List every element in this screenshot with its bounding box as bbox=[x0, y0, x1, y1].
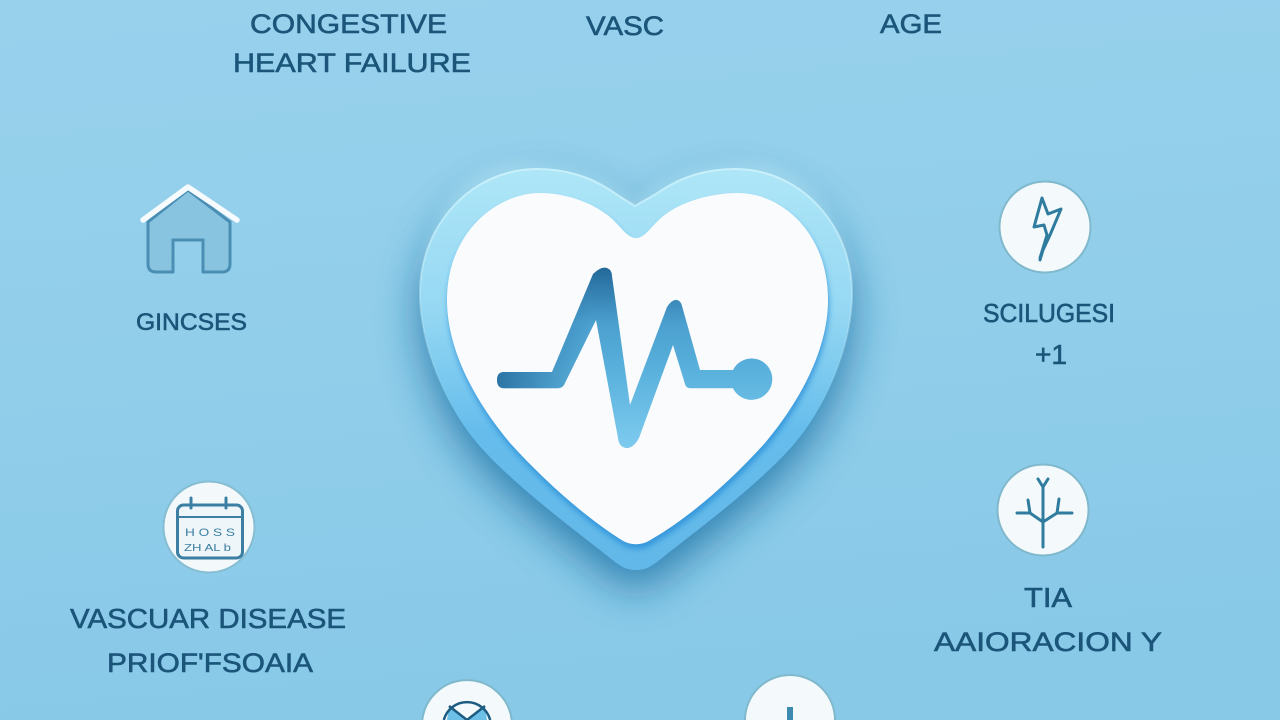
heading: congestive heart failure: HEART FAILURE bbox=[233, 48, 471, 78]
icon: bottom right circle bbox=[745, 675, 835, 720]
heart glow bbox=[425, 162, 847, 280]
label: plus one: +1 bbox=[1035, 339, 1067, 370]
icon: house bbox=[143, 187, 237, 272]
label: second line: PRIOF'FSOAIA bbox=[107, 648, 313, 678]
icon: branching vessel bbox=[998, 464, 1088, 556]
label: ginc ses: GINCSES bbox=[136, 309, 247, 336]
white heart bbox=[447, 193, 828, 544]
heart shadow bbox=[420, 187, 852, 588]
label: garbled word: SCILUGESI bbox=[983, 298, 1115, 328]
icon: calendar bbox=[164, 482, 254, 572]
inner shadow of white heart bbox=[448, 198, 829, 549]
icon: bottom left circle bbox=[422, 680, 512, 720]
item: stroke bolt bbox=[983, 182, 1115, 370]
item: vascular disease bbox=[70, 482, 346, 678]
pulse line cut-out bbox=[497, 268, 772, 448]
heading: age: AGE bbox=[880, 9, 942, 39]
icon: calendar: ZH AL b bbox=[184, 543, 232, 554]
icon: calendar: H O S S bbox=[185, 527, 235, 539]
item: tia bbox=[934, 464, 1162, 657]
icon: lightning bolt bbox=[1000, 182, 1090, 272]
item: home bbox=[136, 187, 247, 336]
heading: vasc: VASC bbox=[586, 11, 664, 41]
heading: congestive heart failure bbox=[233, 9, 471, 78]
outer heart bbox=[420, 169, 852, 570]
label: vascular disease: VASCUAR DISEASE bbox=[70, 603, 346, 634]
central heart illustration bbox=[420, 162, 852, 588]
heading: congestive heart failure: CONGESTIVE bbox=[250, 9, 447, 39]
label: second line: AAIORACION Y bbox=[934, 627, 1162, 657]
label: tia: TIA bbox=[1024, 582, 1072, 613]
